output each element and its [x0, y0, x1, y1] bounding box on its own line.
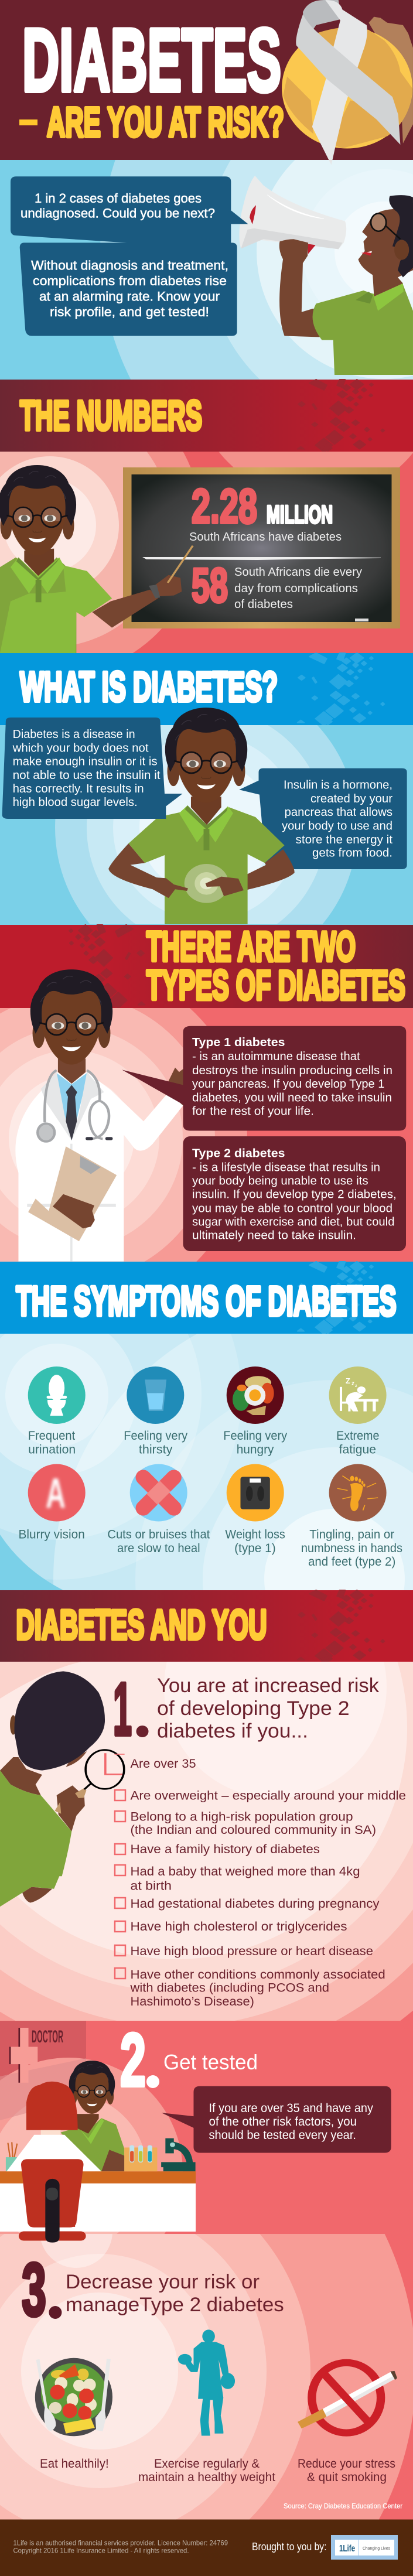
label: feeling very hungry: Feeling very: [223, 1429, 288, 1443]
icon: no smoking: [298, 2363, 397, 2433]
card: type 2 diabetes: [183, 1136, 406, 1251]
illustration: man with megaphone: [239, 176, 413, 375]
label: exercise: Exercise regularly &: [154, 2457, 260, 2471]
checklist: risk factors: at birth: [130, 1879, 172, 1892]
label: tingling: Tingling, pain or: [309, 1528, 394, 1542]
speech bubble: test every year: If you are over 35 and have any: [209, 2102, 373, 2115]
footer: [0, 2520, 413, 2576]
stat: 58 per day: [192, 558, 362, 613]
source note: Source: Cray Diabetes Education Center: [284, 2502, 402, 2510]
label: reduce stress: [298, 2457, 395, 2484]
card: type 2 diabetes: - is a lifestyle disease that results in: [192, 1161, 380, 1174]
icon: crossed plasters: [130, 1464, 187, 1522]
speech bubble: undiagnosed: undiagnosed. Could you be next?: [21, 206, 215, 220]
section header: symptoms: [0, 1262, 413, 1334]
speech bubble: what is diabetes: Diabetes is a disease in: [13, 728, 135, 741]
checklist: risk factors: Hashimoto’s Disease): [130, 1995, 254, 2008]
card: type 1 diabetes: [122, 1026, 406, 1131]
logo: 1Life: 1Life: [339, 2544, 355, 2554]
label: extreme fatigue: [336, 1429, 379, 1456]
checklist: risk factors: Had gestational diabetes during pregnancy: [130, 1897, 380, 1911]
heading: increased risk: of developing Type 2: [157, 1697, 350, 1720]
label: weight loss: Weight loss: [225, 1528, 285, 1542]
illustration: man pointing at pancreas: [108, 768, 407, 924]
card: type 2 diabetes: Type 2 diabetes: [192, 1147, 285, 1160]
logo: 1Life: Changing Lives: [363, 2547, 390, 2551]
label: tingling: numbness in hands: [301, 1542, 402, 1555]
panel: symptoms: [0, 1334, 413, 1590]
head: [30, 969, 112, 1065]
speech bubble: undiagnosed: 1 in 2 cases of diabetes goes: [35, 191, 202, 206]
panel: the numbers: [0, 452, 413, 653]
label: cuts or bruises: [107, 1528, 210, 1555]
legal text: Copyright 2016 1Life Insurance Limited - All rights reserved.: [13, 2547, 189, 2555]
text: what insulin is: pancreas that allows: [285, 806, 392, 819]
numeral 2: 2: [120, 2018, 146, 2102]
panel: hero callouts: [0, 160, 413, 380]
icon: glass of water: [127, 1366, 184, 1424]
label: feeling very hungry: hungry: [237, 1443, 274, 1456]
label: extreme fatigue: Extreme: [336, 1429, 379, 1443]
checklist: risk factors: Have other conditions commonly associated: [130, 1968, 385, 1981]
panel: get tested: DOCTOR: [32, 2027, 63, 2047]
label: weight loss: (type 1): [234, 1542, 276, 1555]
label: feeling very hungry: [223, 1429, 288, 1456]
card: type 1 diabetes: diabetes, you will need to take insulin: [192, 1091, 392, 1104]
checklist: risk factors: Belong to a high-risk population group: [130, 1810, 353, 1823]
label: reduce stress: Reduce your stress: [298, 2457, 395, 2471]
label: cuts or bruises: are slow to heal: [117, 1542, 200, 1555]
icon: foot with tingling: [329, 1464, 387, 1522]
section header: diabetes and you: [0, 1590, 413, 1663]
speech bubble: what is diabetes: make enough insulin or it is: [13, 756, 158, 768]
card: type 2 diabetes: ultimately need to take insulin.: [192, 1229, 356, 1242]
panel: get tested: [0, 2021, 413, 2234]
stat: 58 per day: 58: [192, 558, 228, 613]
icon: person asleep at desk: Z: [346, 1376, 350, 1385]
card: type 2 diabetes: insulin. If you develop type 2 diabetes,: [192, 1188, 397, 1201]
stat: 58 per day: of diabetes: [234, 598, 293, 611]
label: frequent urination: [28, 1429, 76, 1456]
icon: toilet: [28, 1366, 86, 1424]
checklist: risk factors: (the Indian and coloured community in SA): [130, 1823, 376, 1837]
illustration: desk and doctor from behind: [0, 2082, 196, 2232]
checklist: risk factors: Have high blood pressure or heart disease: [130, 1945, 373, 1958]
card: type 1 diabetes: your pancreas. If you develop Type 1: [192, 1078, 384, 1091]
stat: 2.28 million: MILLION: [267, 501, 333, 529]
stat: 2.28 million: 2.28: [192, 479, 257, 533]
stat: 2.28 million: South Africans have diabetes: [189, 531, 342, 544]
label: feeling very thirsty: [124, 1429, 188, 1456]
label: feeling very thirsty: Feeling very: [124, 1429, 188, 1443]
icon: awareness ribbon on yellow circle: [282, 0, 413, 165]
label: reduce stress: & quit smoking: [307, 2471, 387, 2484]
speech bubble: test every year: [162, 2086, 391, 2153]
section header: the numbers: [0, 380, 413, 452]
checklist: risk factors: with diabetes (including PCOS and: [129, 1981, 329, 1995]
section header: what is diabetes: [0, 653, 413, 726]
icon: man with dumbbells: [178, 2329, 235, 2436]
heading: increased risk: [157, 1675, 380, 1743]
text: what insulin is: your body to use and: [282, 820, 392, 833]
card: type 1 diabetes: - is an autoimmune disease that: [192, 1050, 360, 1063]
stat: 58 per day: South Africans die every: [234, 566, 362, 579]
icon: plate of food: [227, 1366, 284, 1424]
stat: 58 per day: day from complications: [234, 582, 358, 595]
speech bubble: what is diabetes: has correctly. It results in: [13, 783, 144, 795]
speech bubble: what is diabetes: [2, 718, 183, 819]
heading: increased risk: diabetes if you...: [157, 1720, 308, 1743]
panel: two types: [0, 969, 413, 1262]
icon: plate of salad: [35, 2358, 112, 2436]
numeral 1: 1: [113, 1668, 132, 1751]
label: cuts or bruises: Cuts or bruises that: [107, 1528, 210, 1542]
heading: get tested: Get tested: [163, 2050, 258, 2074]
icon: blurry letter: A: [46, 1470, 66, 1517]
speech bubble: test every year: should be tested every year.: [209, 2129, 356, 2142]
card: type 2 diabetes: you may be able to control your blood: [192, 1202, 392, 1215]
chalkboard: [123, 467, 400, 628]
heading: are you at risk: [19, 100, 284, 146]
illustration: consultation at desk: [60, 2114, 124, 2171]
label: tingling: and feet (type 2): [308, 1555, 395, 1569]
text: what insulin is: [282, 779, 392, 860]
illustration: teacher pointing: [0, 465, 193, 653]
sign: doctor cross: [9, 2027, 63, 2083]
label: frequent urination: Frequent: [28, 1429, 75, 1443]
icon: person asleep at desk: [329, 1366, 387, 1424]
section header: the numbers: THE NUMBERS: [20, 393, 202, 439]
label: exercise: [138, 2457, 275, 2484]
illustration: man with magnifying glass: [0, 1671, 125, 1876]
label: exercise: maintain a healthy weight: [138, 2471, 275, 2484]
logo: 1Life: [331, 2535, 398, 2560]
label: blurry vision: Blurry vision: [19, 1528, 85, 1542]
speech bubble: what is diabetes: not able to use the insulin it: [13, 769, 161, 782]
label: frequent urination: urination: [28, 1443, 76, 1456]
icon: person asleep at desk: z: [351, 1381, 354, 1387]
legal text: 1Life is an authorised financial services provider. Licence Number: 24769: [13, 2539, 228, 2547]
numeral 3: 3: [22, 2248, 46, 2332]
heading: decrease risk: Decrease your risk or: [66, 2271, 260, 2293]
heading: increased risk: You are at increased risk: [157, 1675, 380, 1697]
speech bubble: get tested: [20, 242, 237, 336]
card: type 1 diabetes: destroys the insulin producing cells in: [192, 1064, 392, 1077]
text: what insulin is: gets from food.: [312, 847, 392, 860]
text: what insulin is: Insulin is a hormone,: [284, 779, 392, 792]
label: feeling very thirsty: thirsty: [139, 1443, 173, 1456]
checklist: risk factors: Had a baby that weighed more than 4kg: [130, 1865, 360, 1878]
speech bubble: what is diabetes: which your body does not: [12, 742, 149, 754]
chair base: [19, 2223, 86, 2243]
text: what insulin is: created by your: [310, 792, 392, 805]
speech bubble: get tested: risk profile, and get tested!: [50, 305, 209, 319]
label: tingling: [301, 1528, 402, 1569]
icon: weighing scale: [227, 1464, 284, 1522]
checklist: risk factors: Are overweight – especially around your middle: [130, 1789, 406, 1803]
legal text: [13, 2539, 228, 2555]
label: extreme fatigue: fatigue: [339, 1443, 376, 1456]
speech bubble: get tested: Without diagnosis and treatment,: [31, 258, 228, 273]
card: type 1 diabetes: Type 1 diabetes: [192, 1036, 285, 1049]
speech bubble: get tested: complications from diabetes rise: [33, 274, 227, 288]
label: eat healthily: Eat healthily!: [40, 2457, 109, 2471]
speech bubble: undiagnosed: [11, 176, 248, 244]
illustration: doctor: [15, 1058, 183, 1262]
panel: risk factors: [0, 1662, 413, 2021]
head: [165, 708, 247, 803]
icon: blurry letter: [28, 1464, 86, 1522]
label: weight loss: [225, 1528, 285, 1555]
text: what insulin is: store the energy it: [295, 833, 392, 846]
checklist: risk factors: Have a family history of diabetes: [130, 1843, 320, 1856]
panel: what is diabetes: [0, 708, 413, 925]
panel: title banner: [0, 0, 413, 165]
heading: decrease risk: [66, 2271, 284, 2316]
card: type 1 diabetes: for the rest of your life.: [192, 1105, 314, 1118]
speech bubble: get tested: at an alarming rate. Know your: [39, 289, 220, 303]
checklist: risk factors: [115, 1757, 406, 2008]
checklist: risk factors: Are over 35: [130, 1757, 196, 1771]
card: type 2 diabetes: your body being unable to use its: [192, 1175, 368, 1188]
heading: decrease risk: manageType 2 diabetes: [66, 2294, 284, 2316]
brought to you by: Brought to you by:: [252, 2541, 327, 2553]
card: type 2 diabetes: sugar with exercise and diet, but could: [192, 1215, 395, 1228]
speech bubble: test every year: of the other risk factors, you: [209, 2115, 357, 2129]
checklist: risk factors: Have high cholesterol or triglycerides: [130, 1920, 347, 1933]
section header: two types: [0, 924, 413, 1009]
panel: decrease your risk: [0, 2223, 413, 2520]
speech bubble: what is diabetes: high blood sugar levels.: [13, 796, 138, 809]
icon: person asleep at desk: z: [355, 1384, 357, 1388]
stat: 2.28 million: [189, 479, 342, 544]
